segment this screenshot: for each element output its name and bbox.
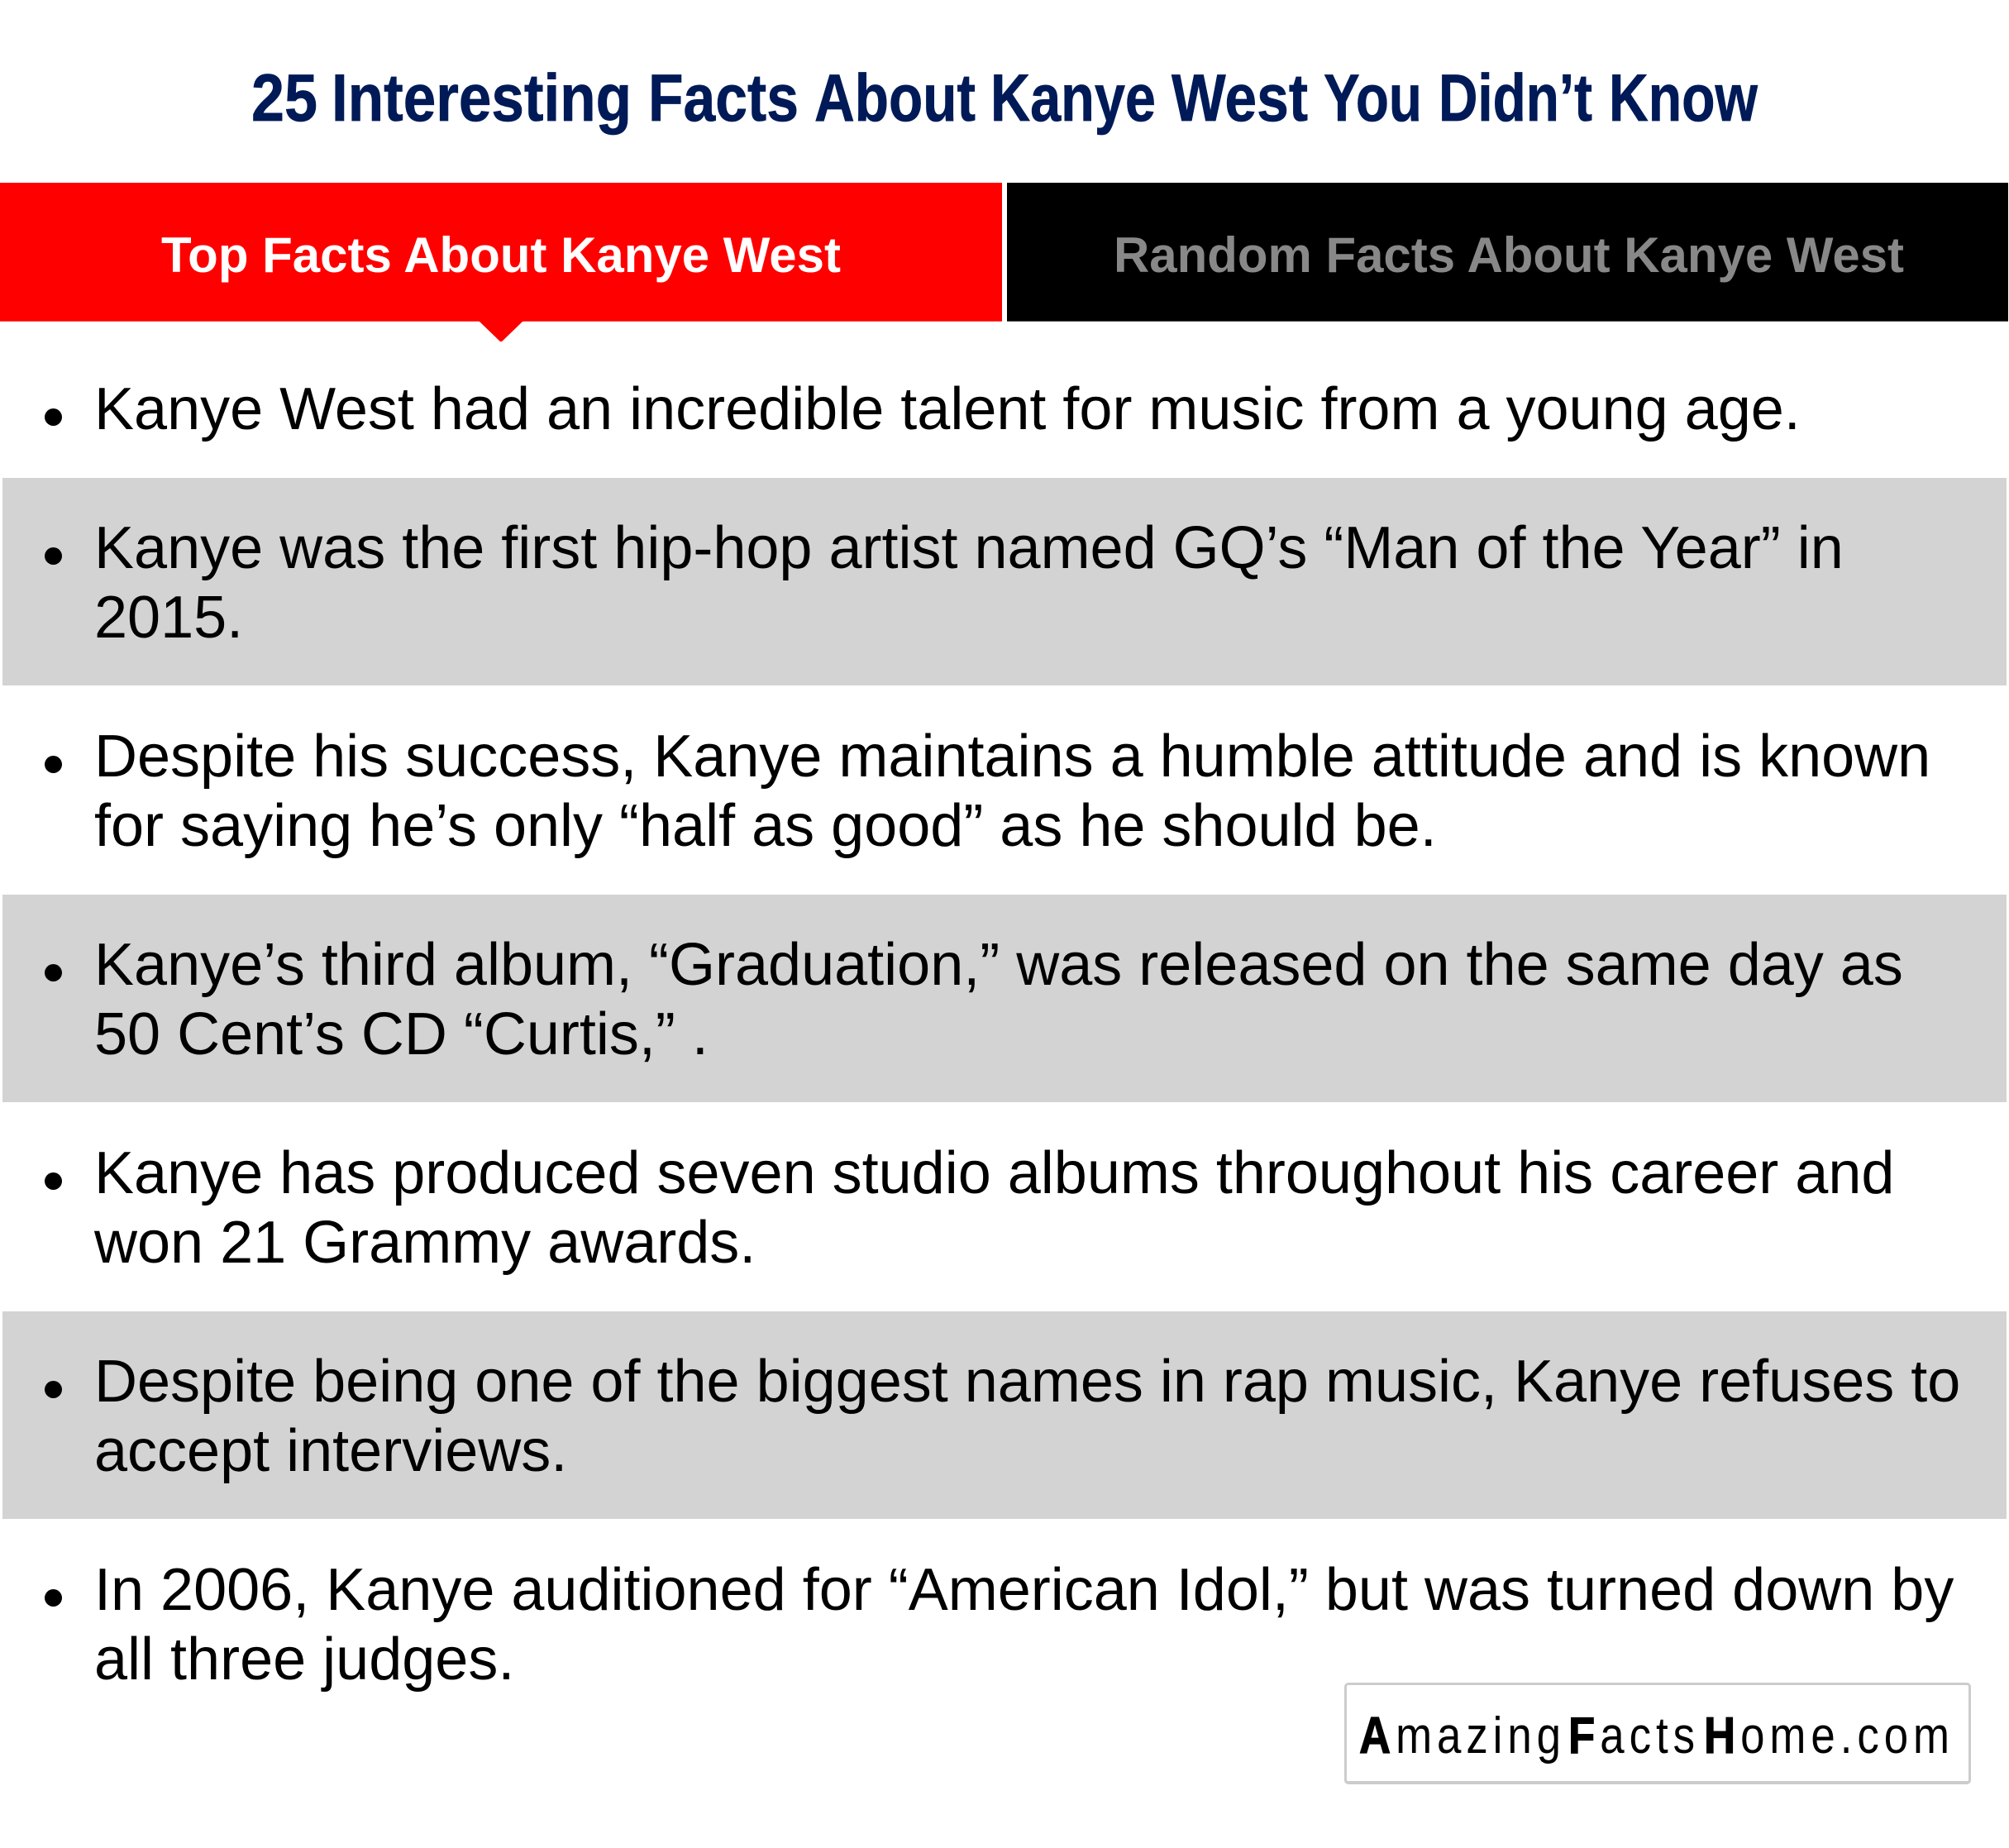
fact 5: Kanye has produced seven studio albums throughout his career and — [94, 1140, 1894, 1206]
fact 3 — [45, 723, 1930, 859]
fact 6: Despite being one of the biggest names in rap music, Kanye refuses to — [94, 1349, 1960, 1415]
logo text: Home.com — [1704, 1707, 1954, 1764]
fact 4 — [2, 895, 2007, 1102]
fact 2: 2015. — [94, 585, 243, 651]
fact 7 — [45, 1557, 1954, 1693]
title: You — [1324, 61, 1422, 136]
fact 4: 50 Cent’s CD “Curtis,” . — [94, 1001, 709, 1067]
title: About — [814, 61, 976, 136]
logo text: Amazing — [1359, 1707, 1566, 1764]
fact 2: Kanye was the first hip-hop artist named GQ’s “Man of the Year” in — [94, 515, 1844, 581]
logo text — [1359, 1707, 1954, 1764]
fact 7: all three judges. — [94, 1626, 514, 1693]
active tab pointer — [479, 321, 523, 341]
tab background — [0, 183, 1002, 322]
fact 5 — [45, 1140, 1894, 1276]
title: Didn’t — [1439, 61, 1592, 136]
fact 5: won 21 Grammy awards. — [94, 1210, 756, 1276]
tab: random facts (inactive) — [1007, 183, 2008, 322]
title: Know — [1609, 61, 1758, 136]
title: Kanye — [990, 61, 1156, 136]
title: West — [1172, 61, 1308, 136]
fact 6: accept interviews. — [94, 1418, 567, 1484]
title: Interesting — [332, 61, 632, 136]
fact 3: for saying he’s only “half as good” as he should be. — [94, 793, 1437, 859]
tab label: Top Facts About Kanye West — [161, 227, 841, 283]
fact 6 — [2, 1311, 2007, 1519]
title — [251, 61, 1758, 136]
fact 1: Kanye West had an incredible talent for music from a young age. — [94, 376, 1801, 442]
logo badge — [1344, 1683, 1971, 1784]
title: 25 — [251, 61, 317, 136]
fact 4: Kanye’s third album, “Graduation,” was released on the same day as — [94, 932, 1903, 998]
title: Facts — [648, 61, 799, 136]
tab: top facts (active) — [0, 183, 1002, 341]
fact 2 — [2, 478, 2007, 685]
logo text: Facts — [1568, 1707, 1700, 1764]
fact 3: Despite his success, Kanye maintains a humble attitude and is known — [94, 723, 1930, 790]
tab label: Random Facts About Kanye West — [1114, 227, 1904, 283]
fact 7: In 2006, Kanye auditioned for “American Idol,” but was turned down by — [94, 1557, 1954, 1623]
